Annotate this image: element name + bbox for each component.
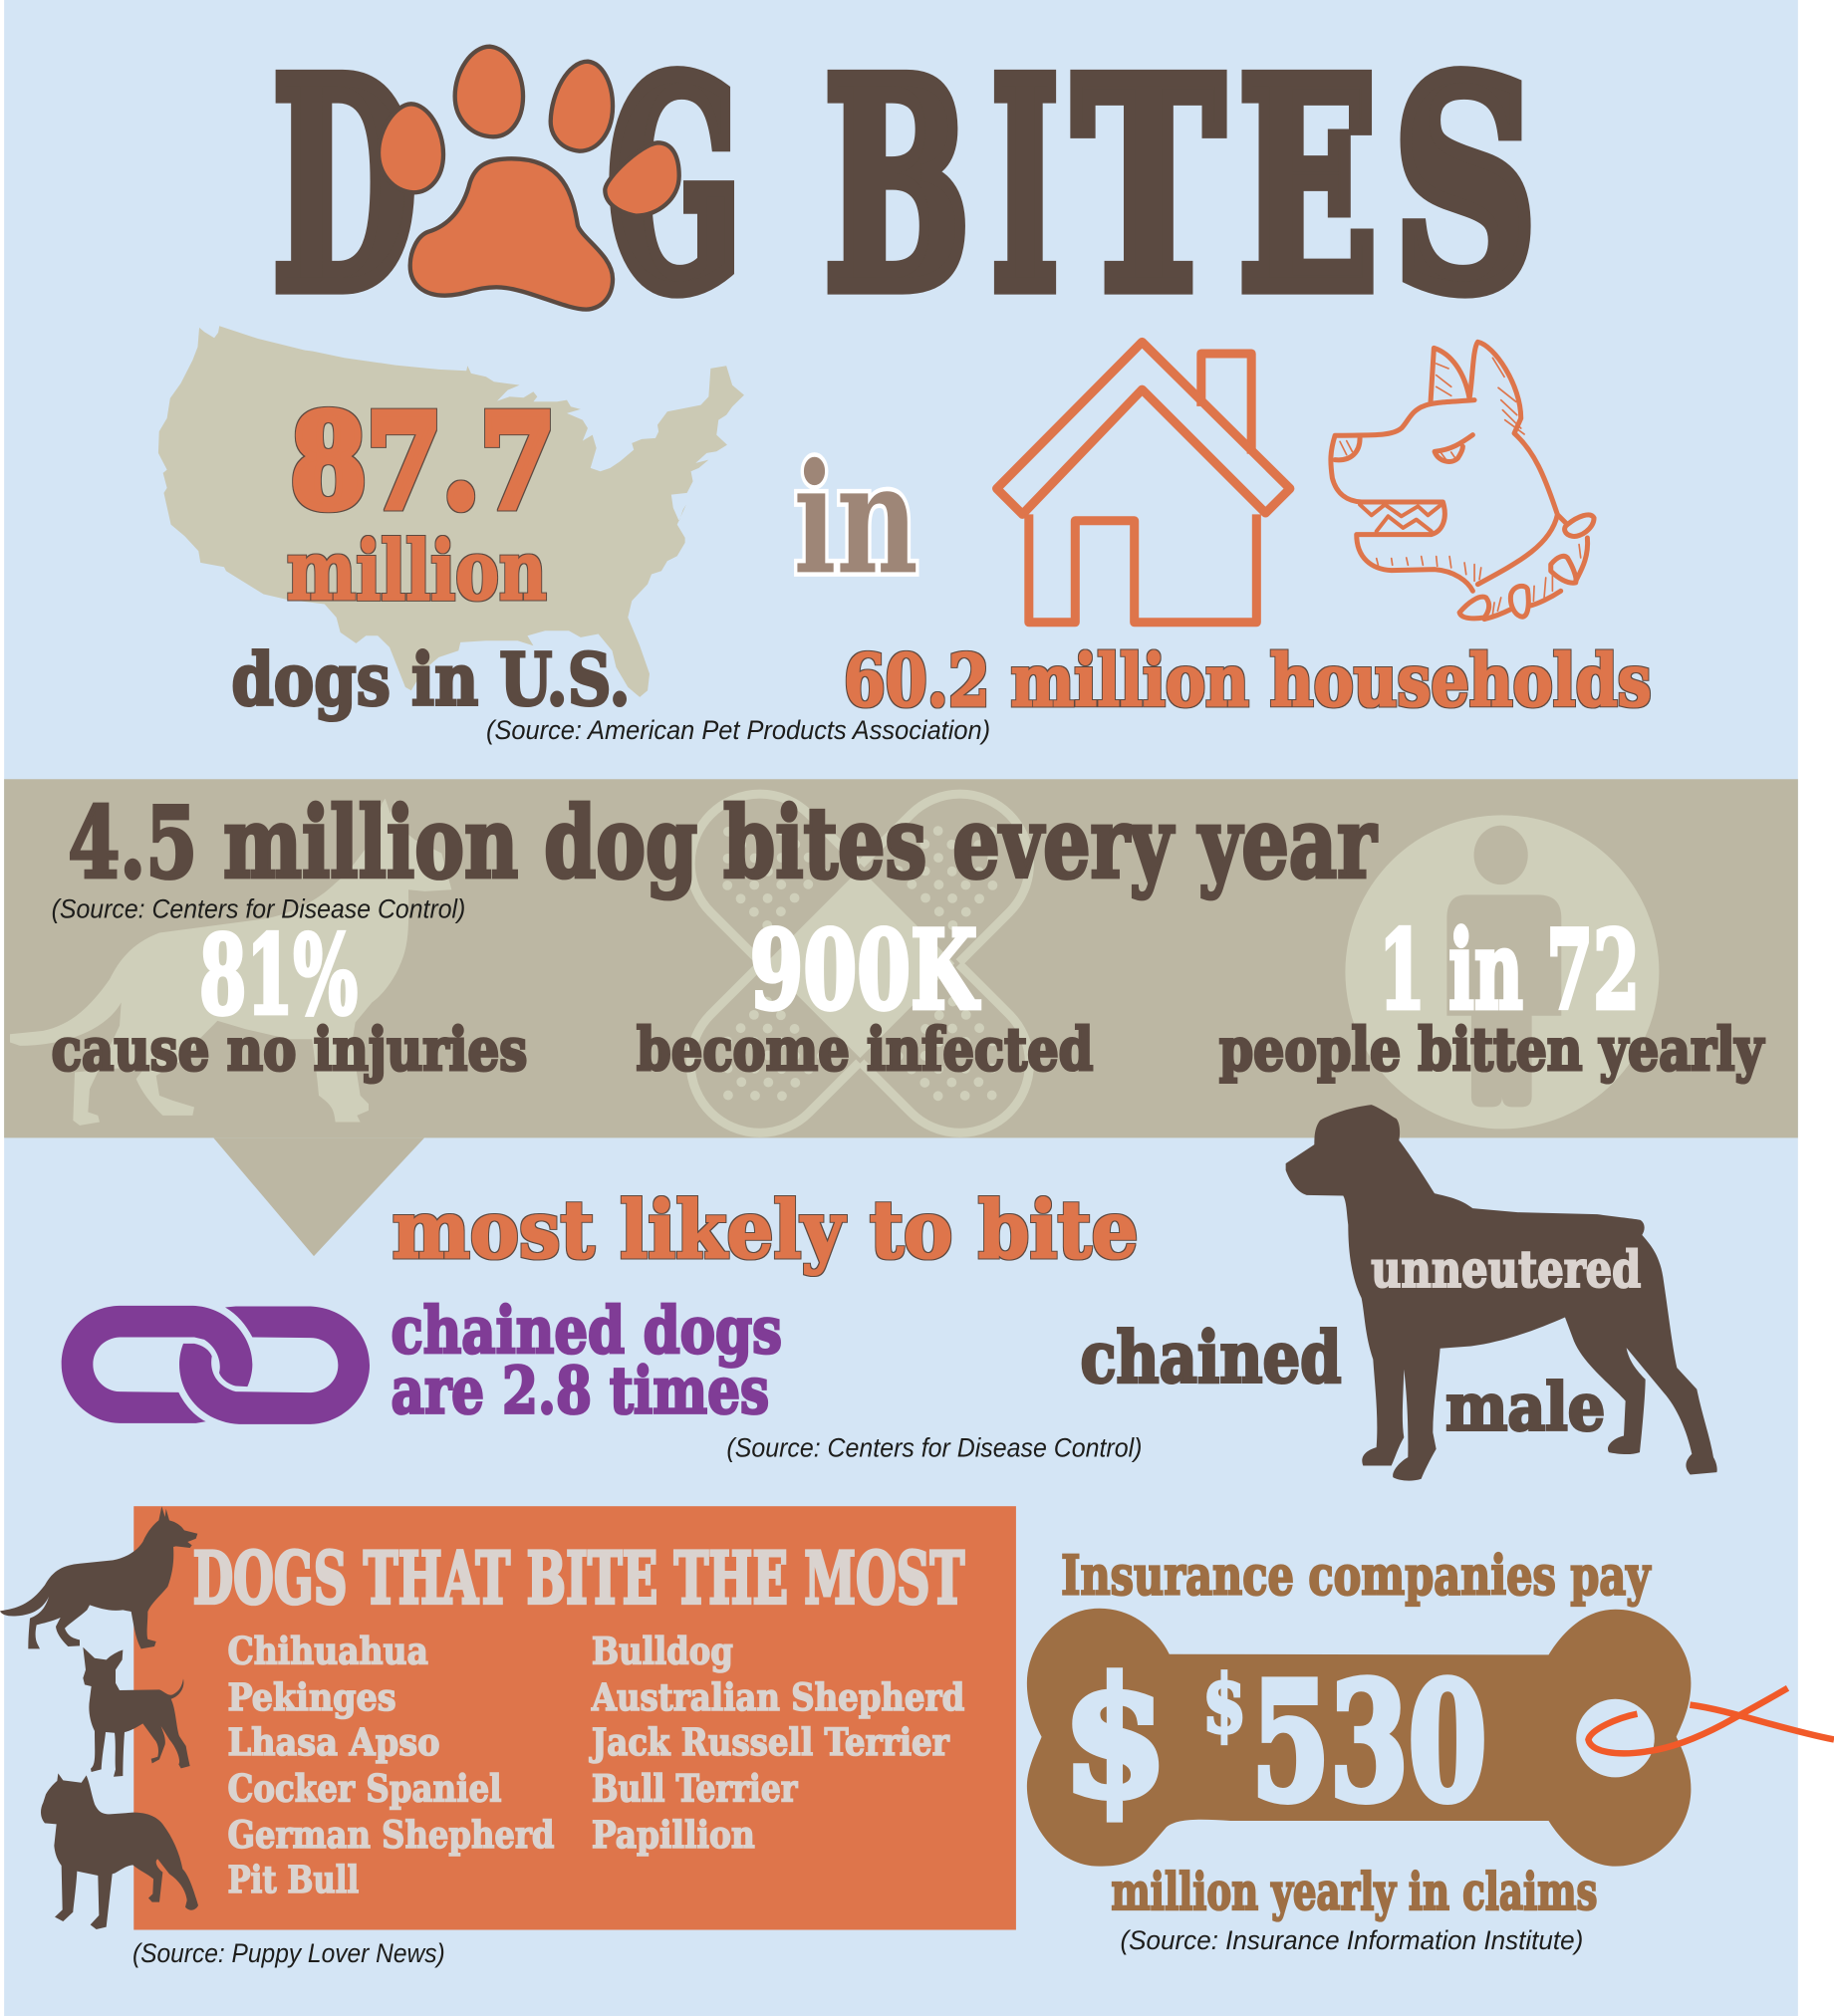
icon: faded dog bbox=[10, 799, 451, 1126]
source: American Pet Products Association: (Source: American Pet Products Association) bbox=[486, 714, 990, 745]
breed list: second column: Bulldog bbox=[592, 1629, 733, 1672]
source: Centers for Disease Control: (Source: Centers for Disease Control) bbox=[726, 1431, 1142, 1462]
title: DOG BITES: B bbox=[825, 18, 969, 354]
breed list: second column: Australian Shepherd bbox=[591, 1675, 964, 1719]
label: unneutered: unneutered bbox=[1371, 1240, 1641, 1299]
stat: 81%: 81% bbox=[199, 911, 358, 1039]
breed list: first column: German Shepherd bbox=[228, 1813, 554, 1857]
icon: house bbox=[997, 342, 1290, 623]
title: DOG BITES: S bbox=[1393, 18, 1537, 354]
heading: most likely to bite: most likely to bite bbox=[393, 1182, 1139, 1276]
breed list: second column: Jack Russell Terrier bbox=[589, 1720, 950, 1764]
breed list: first column: Lhasa Apso bbox=[228, 1720, 440, 1764]
text: dogs in U.S.: dogs in U.S. bbox=[231, 637, 631, 722]
source: Centers for Disease Control: (Source: Centers for Disease Control) bbox=[52, 893, 465, 924]
heading: 4.5 million dog bites every year: 4.5 million dog bites every year bbox=[68, 786, 1377, 900]
big dollar sign: $ bbox=[1062, 1643, 1168, 1834]
heading: DOGS THAT BITE THE MOST: DOGS THAT BITE THE MOST bbox=[193, 1537, 964, 1622]
icon: faded crossed bandages bbox=[661, 765, 1058, 1161]
title: DOG BITES: G bbox=[607, 18, 742, 354]
heading: Insurance companies pay: Insurance companies pay bbox=[1061, 1544, 1652, 1608]
icon: three dog silhouettes bbox=[0, 1506, 198, 1929]
breed list: first column bbox=[228, 1629, 554, 1901]
map of the United States bbox=[158, 326, 744, 697]
stat: 1 in 72: 1 in 72 bbox=[1379, 906, 1640, 1034]
label: become infected: become infected bbox=[637, 1015, 1093, 1085]
title: DOG BITES: T bbox=[1074, 18, 1223, 354]
text: chained dogs are 2.8 times bbox=[391, 1293, 782, 1429]
icon: orange string tied through bone bbox=[1588, 1688, 1834, 1753]
breed list: first column: Chihuahua bbox=[228, 1629, 428, 1672]
speech pointer bbox=[213, 1137, 424, 1256]
panel: dogs that bite the most bbox=[133, 1506, 1016, 1930]
icon: snarling dog head bbox=[1331, 342, 1594, 620]
title: DOG BITES bbox=[273, 18, 1537, 354]
panel: bite statistics band bbox=[4, 765, 1798, 1256]
title: DOG BITES: I bbox=[991, 18, 1059, 354]
small dollar sign: $ bbox=[1202, 1657, 1246, 1751]
label: male: male bbox=[1445, 1368, 1605, 1445]
stat: 530: 530 bbox=[1251, 1647, 1486, 1838]
breed list: first column: Cocker Spaniel bbox=[228, 1766, 501, 1810]
breed list: second column: Bull Terrier bbox=[592, 1766, 799, 1810]
icon: paw print bbox=[379, 47, 679, 310]
icon: rottweiler silhouette bbox=[1286, 1105, 1717, 1481]
stat: 900K: 900K bbox=[750, 906, 980, 1034]
text: in: in bbox=[794, 429, 918, 608]
breed list: first column: Pekinges bbox=[228, 1675, 396, 1719]
breed list: second column: Papillion bbox=[592, 1813, 755, 1857]
text: million yearly in claims: million yearly in claims bbox=[1111, 1863, 1597, 1922]
breed list: first column: Pit Bull bbox=[228, 1858, 359, 1901]
label: cause no injuries: cause no injuries bbox=[52, 1015, 527, 1085]
stat label: million: million bbox=[287, 523, 547, 620]
label: chained: chained bbox=[1080, 1316, 1342, 1399]
text: chained dogs are 2.8 times: chained dogs bbox=[391, 1293, 782, 1369]
stat: 87.7: 87.7 bbox=[291, 387, 556, 538]
icon: faded person in circle bbox=[1345, 815, 1659, 1129]
text: chained dogs are 2.8 times: are 2.8 times bbox=[391, 1354, 769, 1429]
breed list: second column bbox=[589, 1629, 964, 1857]
icon: chain links bbox=[62, 1306, 370, 1424]
source: Insurance Information Institute: (Source: Insurance Information Institute) bbox=[1120, 1924, 1583, 1955]
title: DOG BITES: D bbox=[273, 18, 416, 354]
source: Puppy Lover News: (Source: Puppy Lover News) bbox=[132, 1937, 445, 1968]
icon: bone with claim amount bbox=[1027, 1609, 1691, 1867]
text: 60.2 million households: 60.2 million households bbox=[844, 639, 1652, 724]
title: DOG BITES: E bbox=[1238, 18, 1378, 354]
